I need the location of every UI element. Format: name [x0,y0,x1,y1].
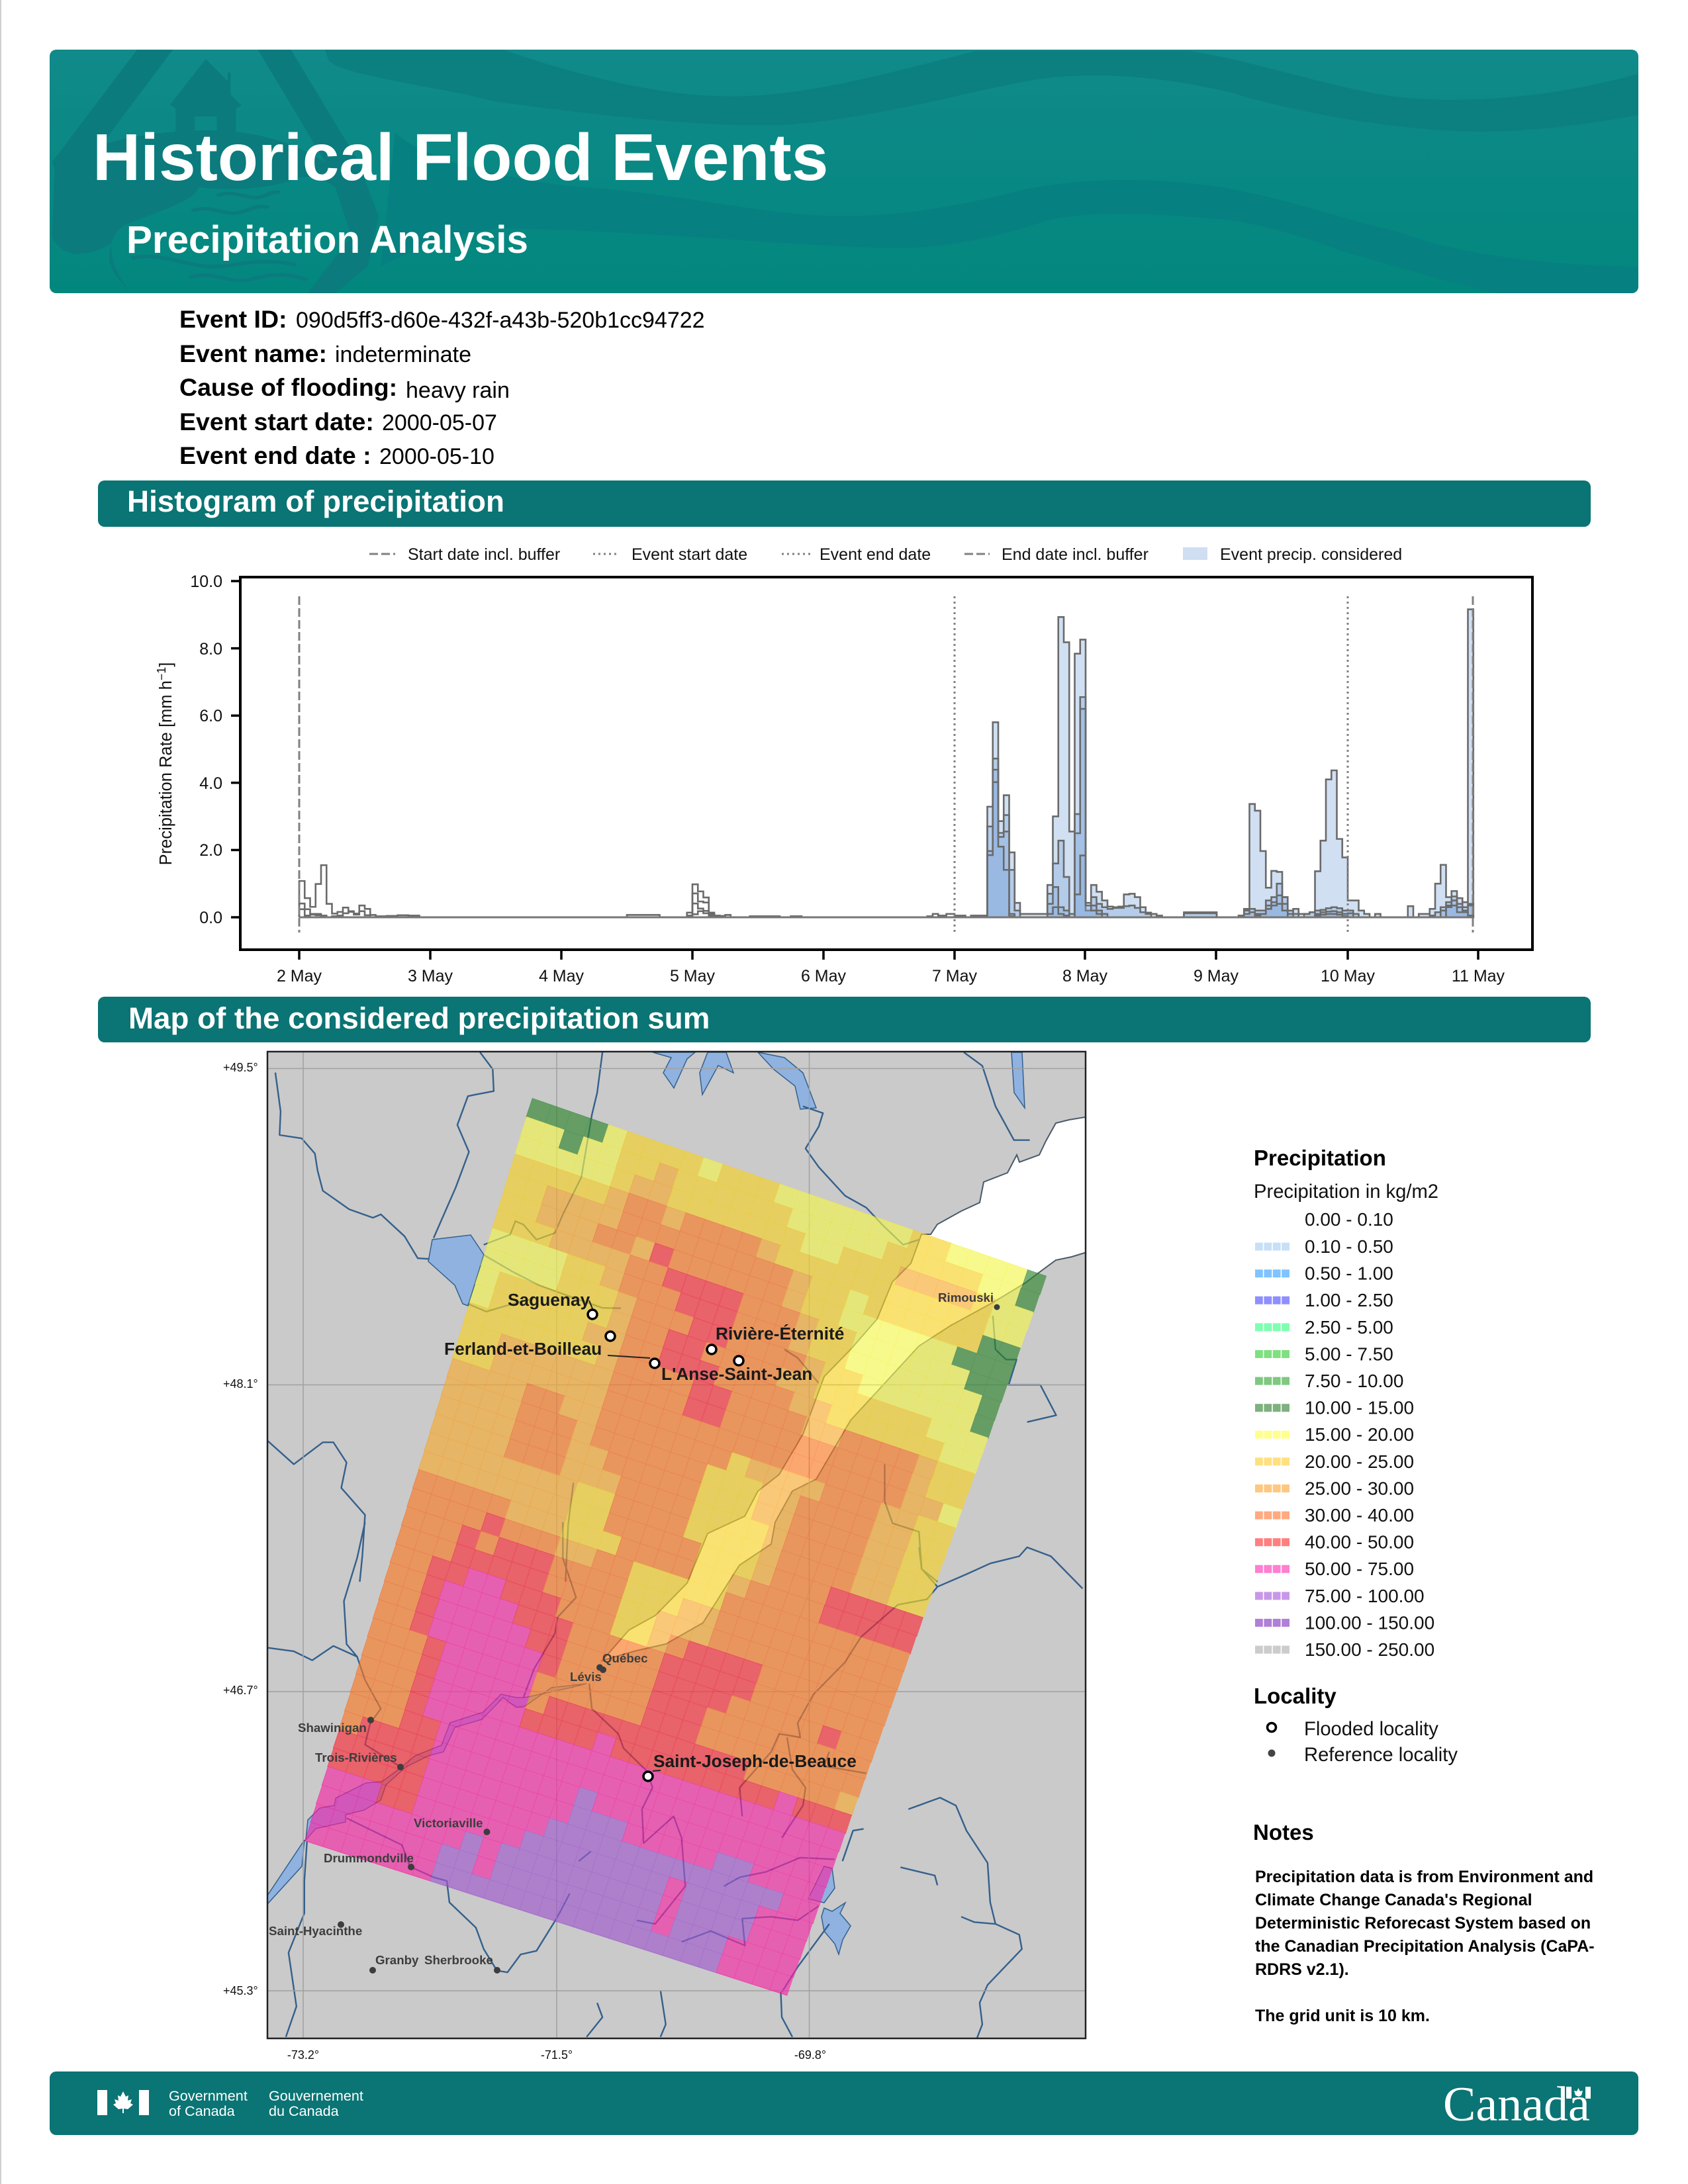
flooded localities: Ferland-et-Boilleau [444,1339,602,1359]
legend: precipitation: 25.00 - 30.00 [1305,1478,1414,1498]
legend: precipitation: Precipitation in kg/m2 [1254,1181,1438,1203]
event name: Event name: [179,340,327,367]
legend: precipitation: 0.00 - 0.10 [1305,1209,1393,1230]
icon: flood house logo [52,50,379,294]
x axis ticks: 10 May [1321,967,1375,985]
x axis ticks: 8 May [1062,967,1108,985]
legend: locality: Reference locality [1304,1745,1458,1766]
legend: locality: Flooded locality [1304,1719,1438,1740]
map coordinate labels: -71.5° [541,2048,573,2062]
map coordinate labels: +48.1° [223,1377,258,1390]
subtitle: Precipitation Analysis [126,218,528,261]
estuary water [602,1116,1089,1661]
x axis ticks: 5 May [670,967,716,985]
event details [179,305,705,469]
y axis ticks: 10.0 [190,572,222,591]
rivers south half [267,1522,1082,2038]
map coordinate labels [223,1061,826,2062]
legend: precipitation: 30.00 - 40.00 [1305,1505,1414,1525]
reference localities [269,1291,1000,1974]
histogram legend: End date incl. buffer [1002,545,1149,564]
x axis ticks: 7 May [932,967,978,985]
government wordmark: Gouvernement [269,2087,363,2104]
histogram legend: Event end date [820,545,931,564]
histogram legend [369,545,1402,564]
legend: precipitation: Precipitation [1254,1146,1386,1170]
footer banner [50,2071,1638,2135]
icon: government flag symbol [97,2090,149,2115]
header banner [50,46,1642,294]
x axis ticks: 3 May [408,967,453,985]
cause of flooding [179,373,510,403]
histogram legend: Event start date [632,545,747,564]
map coordinate labels: +46.7° [223,1684,258,1697]
notes: The grid unit is 10 km. [1255,2007,1430,2025]
x axis ticks: 4 May [539,967,585,985]
precipitation step series [299,610,1474,917]
reference localities: Sherbrooke [424,1953,493,1967]
lakes and St Lawrence river [267,1052,1025,1954]
notes: the Canadian Precipitation Analysis (CaPA- [1255,1937,1595,1956]
flooded localities: Rivière-Éternité [716,1324,844,1343]
y axis label: ] [157,662,175,667]
legend: precipitation: 10.00 - 15.00 [1305,1398,1414,1418]
legend: precipitation: 40.00 - 50.00 [1305,1532,1414,1553]
y axis ticks: 4.0 [199,774,222,793]
notes: Notes [1253,1820,1314,1844]
rivers north half [267,1052,1056,1582]
event end date: 2000-05-10 [379,444,494,469]
flooded localities: Saint-Joseph-de-Beauce [653,1751,857,1771]
event end date [179,441,494,469]
flooded localities [444,1290,857,1781]
reference localities: Victoriaville [414,1816,483,1830]
wave: lower band [381,132,1642,293]
legend: precipitation: 75.00 - 100.00 [1305,1586,1425,1606]
section heading: map [98,997,1591,1042]
flooded localities: L'Anse-Saint-Jean [661,1364,812,1384]
event start date [179,408,497,435]
legend: precipitation: 150.00 - 250.00 [1305,1639,1434,1660]
reference localities: Trois-Rivières [315,1751,397,1764]
map coordinate labels: +49.5° [223,1061,258,1074]
legend: precipitation: 20.00 - 25.00 [1305,1451,1414,1472]
legend: precipitation: 7.50 - 10.00 [1305,1371,1403,1391]
notes [1253,1820,1595,2025]
legend: precipitation: 50.00 - 75.00 [1305,1559,1414,1579]
event name [179,340,471,367]
cause of flooding: Cause of flooding: [179,373,397,401]
legend: precipitation: 1.00 - 2.50 [1305,1290,1393,1310]
government wordmark: Government [169,2087,248,2104]
precipitation grid cells [305,1098,1047,1996]
reference localities: Rimouski [938,1291,994,1304]
histogram legend: Event precip. considered [1220,545,1402,564]
y axis ticks: 2.0 [199,841,222,860]
leader lines [589,1300,661,1771]
map coordinate labels: +45.3° [223,1984,258,1997]
event start date: 2000-05-07 [382,410,497,435]
x axis ticks: 6 May [801,967,847,985]
notes: RDRS v2.1). [1255,1960,1349,1979]
legend: locality: Locality [1254,1684,1336,1708]
y axis ticks: 6.0 [199,707,222,725]
legend: precipitation [1254,1146,1438,1660]
histogram legend: Start date incl. buffer [408,545,560,564]
government wordmark: of Canada [169,2103,236,2119]
y axis ticks [190,572,240,927]
legend: precipitation: 0.10 - 0.50 [1305,1236,1393,1257]
legend: precipitation: 2.50 - 5.00 [1305,1317,1393,1338]
wave: upper band [324,46,1642,132]
section heading: histogram: Histogram of precipitation [127,484,504,518]
start and end date markers [299,596,1473,933]
legend: precipitation: 15.00 - 20.00 [1305,1424,1414,1445]
flooded localities: Saguenay [508,1290,590,1310]
map coordinate labels: -73.2° [287,2048,319,2062]
notes: Deterministic Reforecast System based on [1255,1914,1591,1933]
government wordmark: du Canada [269,2103,340,2119]
reference localities: Granby [375,1953,419,1967]
legend: precipitation: 5.00 - 7.50 [1305,1343,1393,1364]
section heading: histogram [98,480,1591,527]
y axis ticks: 8.0 [199,640,222,659]
map coordinate labels: -69.8° [794,2048,826,2062]
notes: Precipitation data is from Environment and [1255,1868,1593,1886]
section heading: map: Map of the considered precipitation sum [128,1001,710,1035]
event start date: Event start date: [179,408,374,435]
title: Historical Flood Events [93,120,828,195]
x axis ticks: 2 May [277,967,322,985]
reference localities: Québec [602,1651,648,1665]
legend: precipitation: 100.00 - 150.00 [1305,1612,1434,1633]
reference localities: Drummondville [324,1851,414,1865]
histogram chart [155,572,1532,985]
legend: precipitation: 0.50 - 1.00 [1305,1263,1393,1284]
notes: Climate Change Canada's Regional [1255,1891,1532,1909]
event name: indeterminate [335,342,471,367]
y axis ticks: 0.0 [199,909,222,927]
legend: locality [1254,1684,1458,1766]
cause of flooding: heavy rain [406,378,510,403]
event id: 090d5ff3-d60e-432f-a43b-520b1cc94722 [296,308,705,333]
x axis ticks: 9 May [1194,967,1239,985]
reference localities: Shawinigan [298,1721,367,1735]
reference localities: Saint-Hyacinthe [269,1924,362,1938]
x axis ticks: 11 May [1452,967,1505,985]
y axis label: −1 [155,667,168,680]
y axis label: Precipitation Rate [mm h [157,680,175,865]
government wordmark [169,2087,363,2119]
x axis ticks [277,950,1505,985]
Canada wordmark: Canada [1443,2077,1590,2132]
reference localities: Lévis [570,1670,602,1684]
precipitation map [223,1052,1089,2062]
event end date: Event end date : [179,441,371,469]
event id: Event ID: [179,305,287,333]
